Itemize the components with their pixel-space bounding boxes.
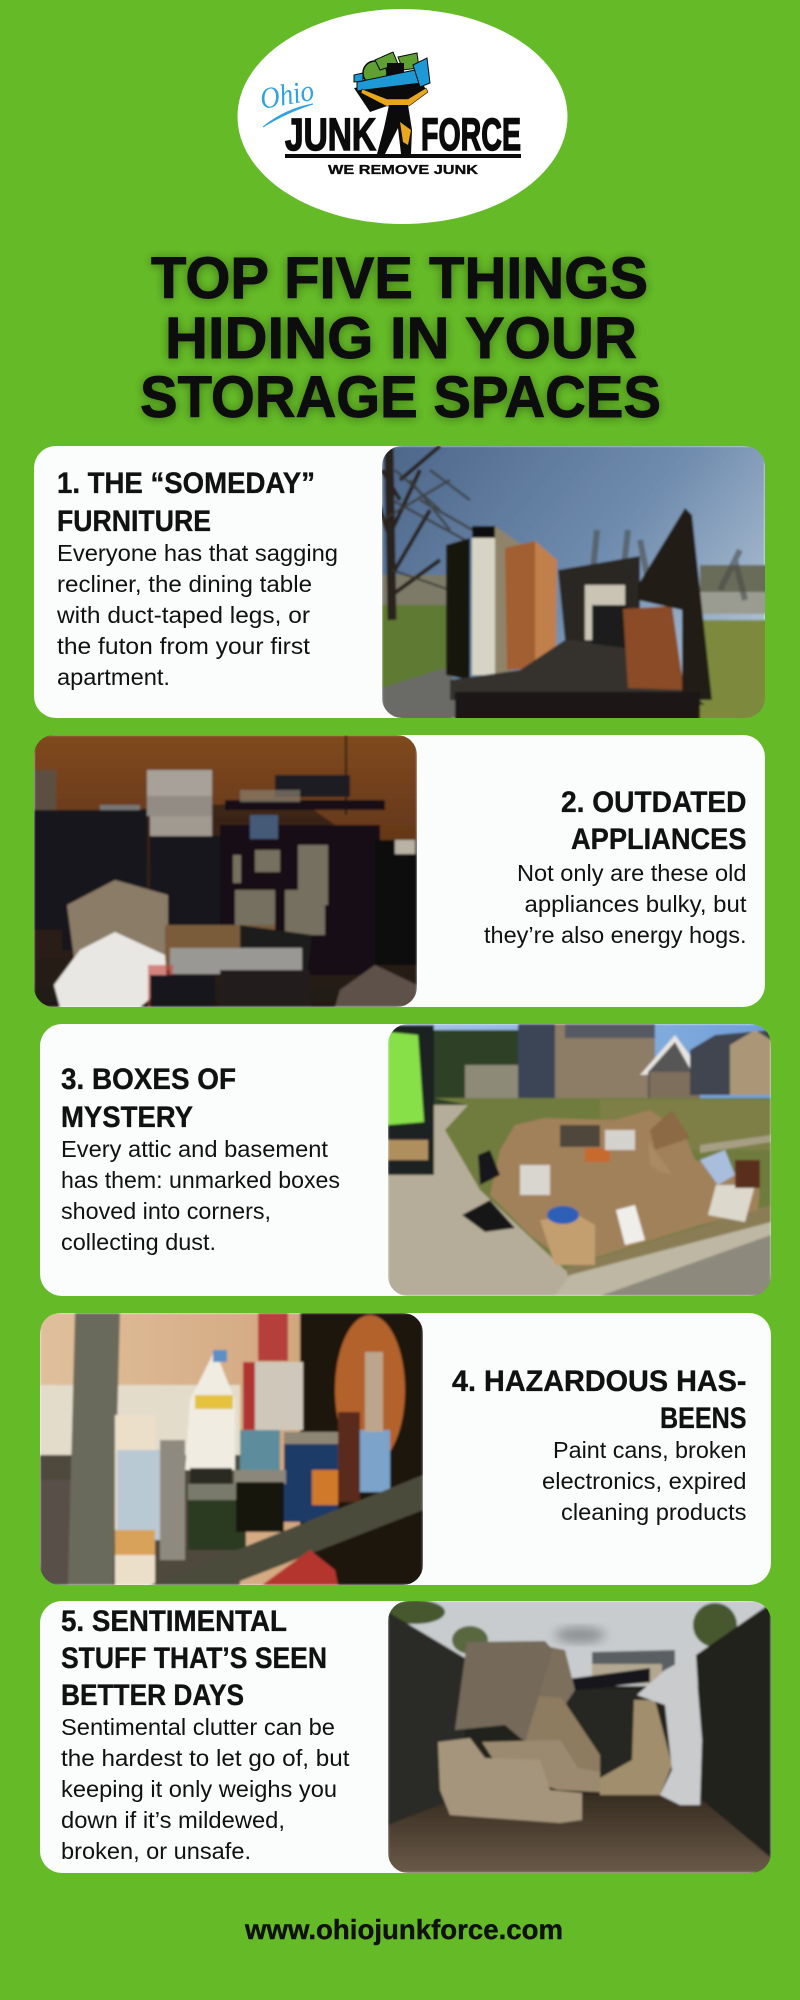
heading [57,467,315,538]
text block: Everyone has that sagging [57,540,338,566]
heading: MYSTERY [61,1101,193,1134]
text block: Paint cans, broken [553,1437,746,1463]
text block: apartment. [57,664,170,690]
logo text: Ohio: Ohio [257,74,316,116]
text block: has them: unmarked boxes [61,1167,340,1193]
title: STORAGE SPACES [140,365,661,430]
photo: paint cans on shelf [40,1313,423,1585]
heading [452,1365,746,1435]
heading [61,1063,236,1134]
heading: 4. HAZARDOUS HAS- [452,1365,746,1398]
panel: sentimental stuff [40,1600,771,1873]
text block [484,860,747,948]
text block: with duct-taped legs, or [56,602,310,628]
panel: someday furniture [34,446,770,722]
text block: collecting dust. [61,1229,216,1255]
text block: Not only are these old [517,860,746,886]
heading: BEENS [660,1402,746,1435]
photo: pile of boxes [388,1024,771,1296]
icon: man lifting sofa [354,52,430,154]
text block: cleaning products [561,1499,746,1525]
text block: shoved into corners, [61,1198,271,1224]
heading: APPLIANCES [571,823,746,856]
heading [61,1605,327,1712]
text block: recliner, the dining table [57,571,312,597]
photo: old electronics [34,735,417,1007]
text block: Sentimental clutter can be [61,1714,335,1740]
photo: teddy bear and couch in dumpster [385,1600,771,1873]
logo text: FORCE: FORCE [421,109,521,160]
panel: boxes of mystery [40,1024,771,1296]
text block: the hardest to let go of, but [61,1745,350,1771]
text block: broken, or unsafe. [61,1838,251,1864]
logo [238,9,568,224]
heading: 5. SENTIMENTAL [61,1605,287,1638]
title [140,246,661,430]
heading: 1. THE “SOMEDAY” [57,467,315,500]
heading: STUFF THAT’S SEEN [61,1642,327,1675]
text block [61,1136,340,1255]
panel: hazardous has-beens [40,1313,771,1585]
text block: keeping it only weighs you [61,1776,337,1802]
logo swoosh [263,104,313,127]
website url: www.ohiojunkforce.com [244,1914,563,1945]
text block: they’re also energy hogs. [484,922,746,948]
heading: FURNITURE [57,505,211,538]
text block: appliances bulky, but [524,891,747,917]
text block [542,1437,746,1525]
text block: electronics, expired [542,1468,746,1494]
text block: down if it’s mildewed, [61,1807,285,1833]
text block: the futon from your first [57,633,311,659]
logo oval [238,9,568,224]
text block [61,1714,350,1864]
logo tagline: WE REMOVE JUNK [328,162,479,177]
photo: furniture in truck [377,446,770,722]
logo text: JUNK: JUNK [285,109,376,160]
title: TOP FIVE THINGS [151,246,648,311]
panel: outdated appliances [34,735,765,1007]
text block: Every attic and basement [61,1136,329,1162]
title: HIDING IN YOUR [165,306,637,371]
text block [56,540,338,690]
heading [561,786,746,856]
heading: 2. OUTDATED [561,786,746,819]
heading: 3. BOXES OF [61,1063,236,1096]
heading: BETTER DAYS [61,1679,244,1712]
